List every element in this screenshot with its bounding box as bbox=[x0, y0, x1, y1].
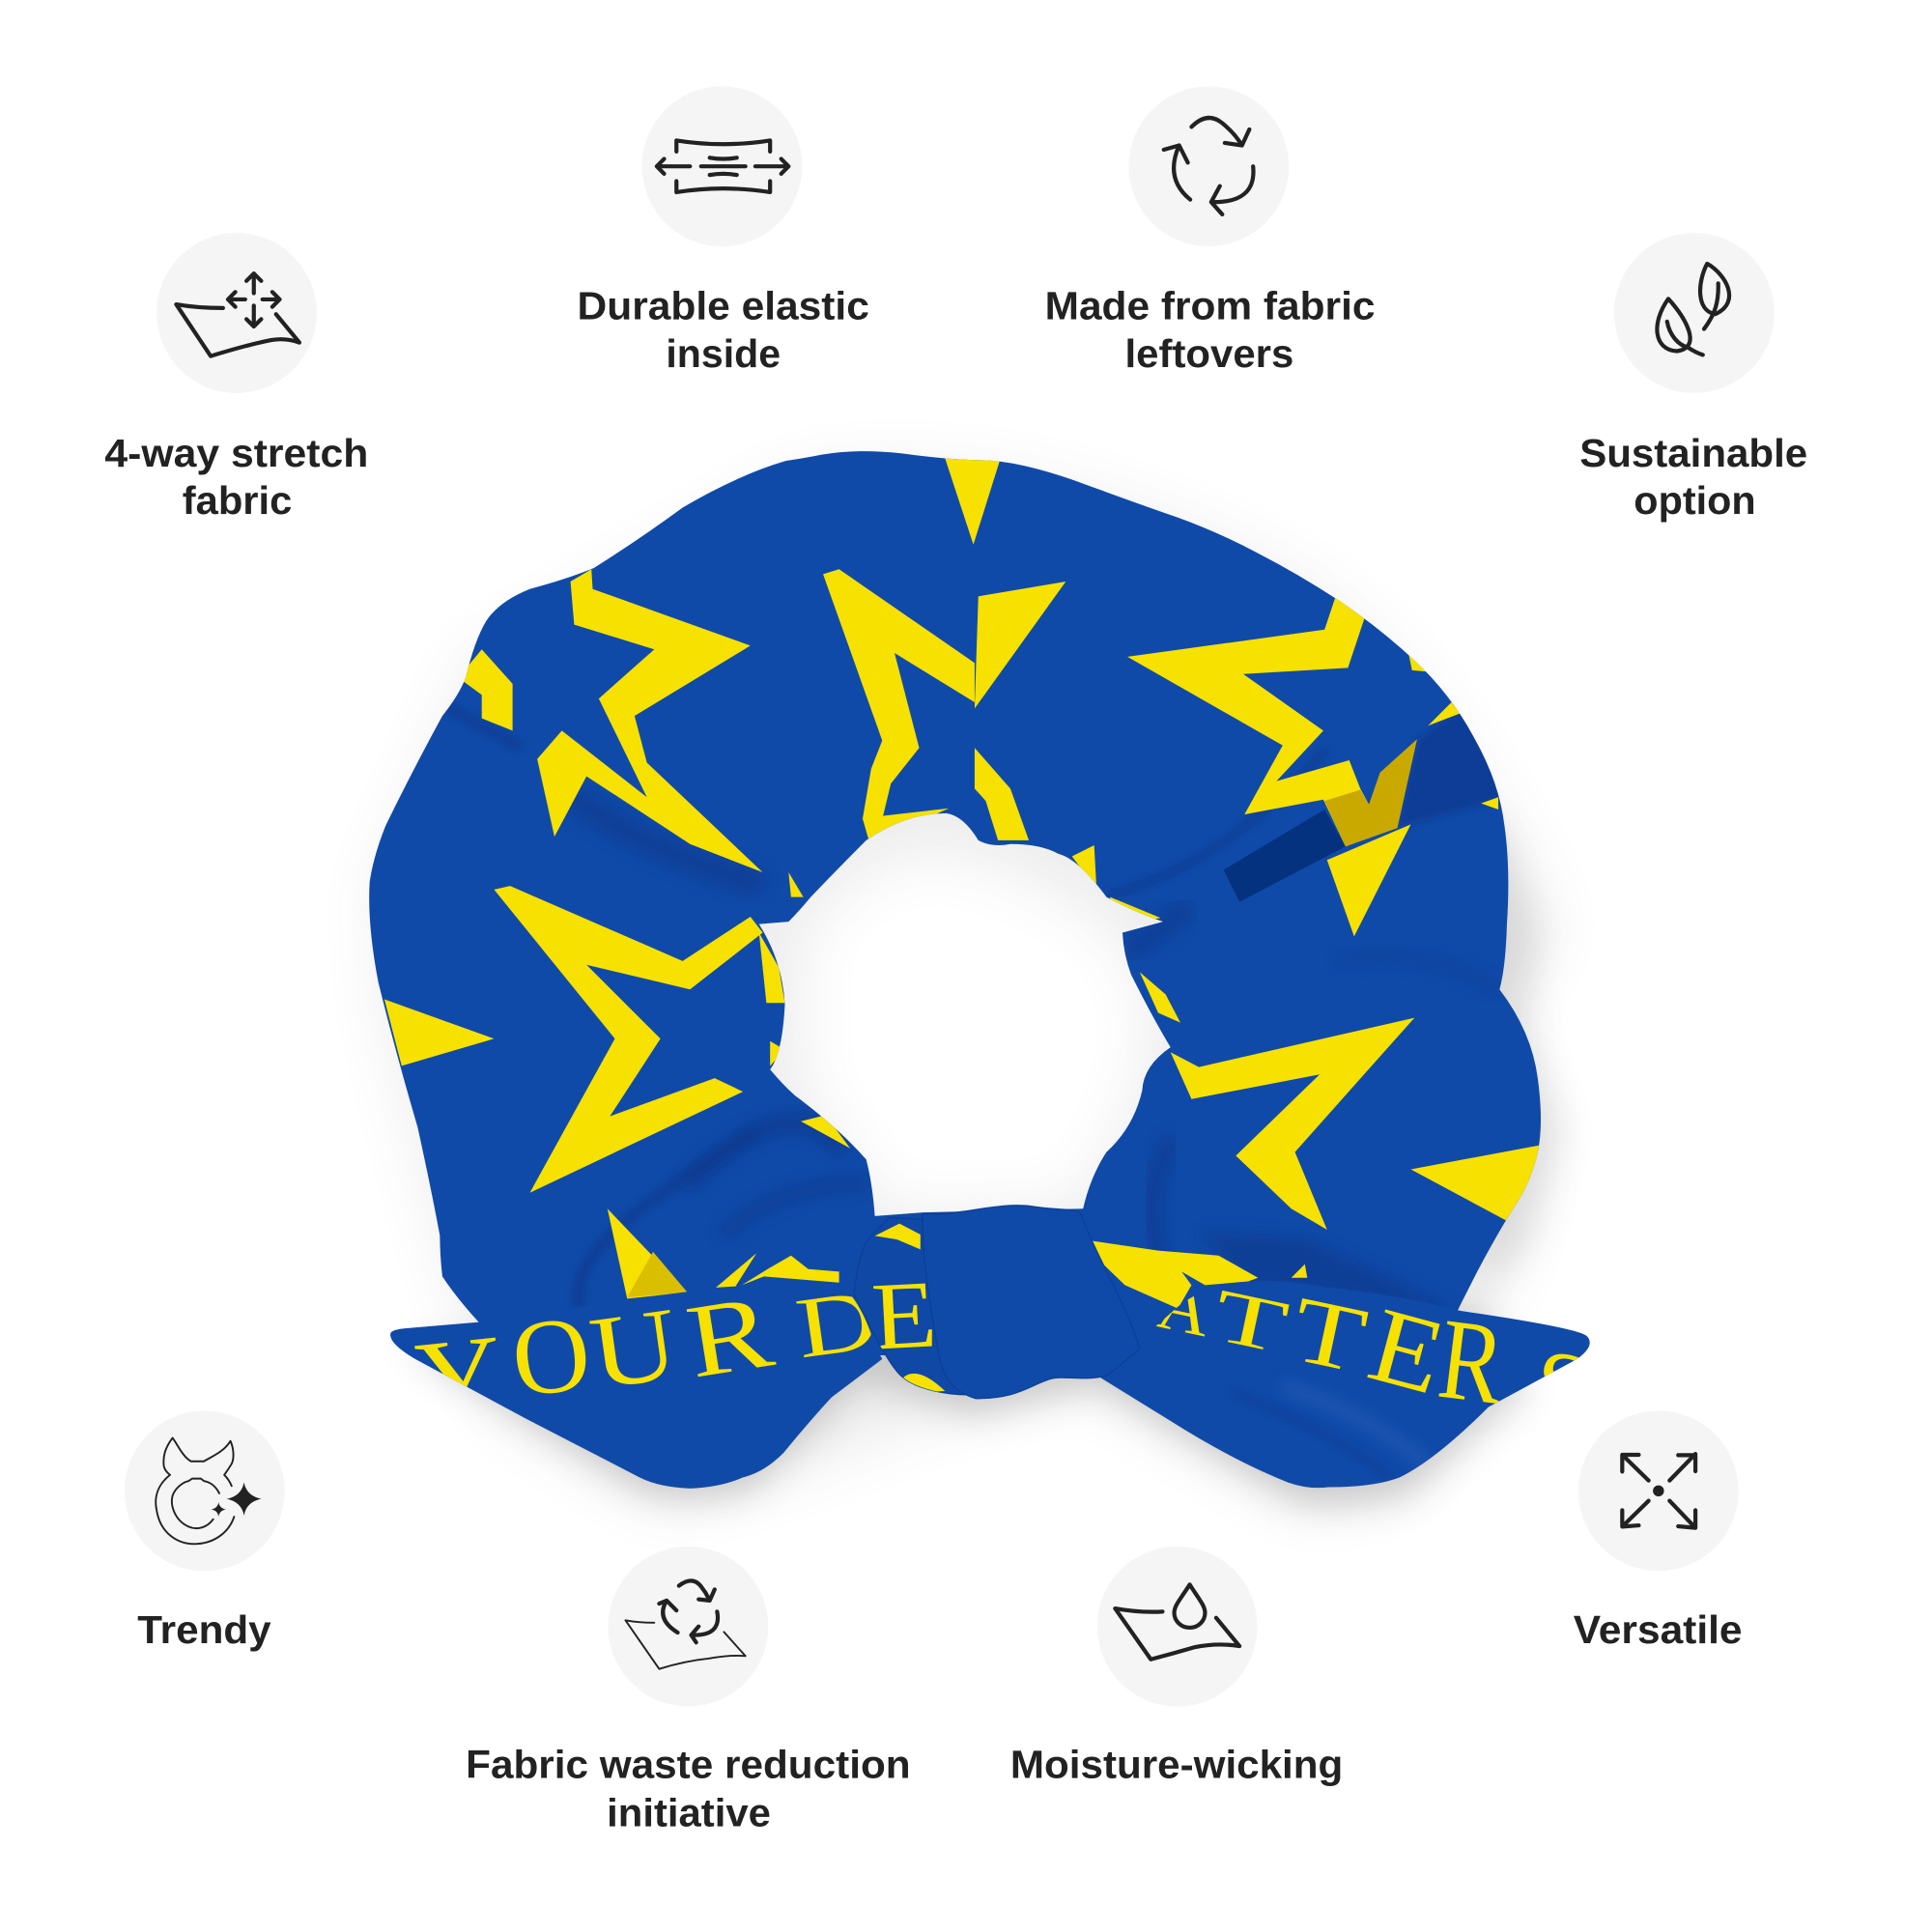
icon: recycle arrows bbox=[1128, 86, 1289, 246]
icon: stretch sheet bbox=[156, 233, 317, 393]
label: Moisture-wicking bbox=[1010, 1743, 1343, 1787]
icon: drop over sheet bbox=[1097, 1547, 1258, 1707]
icon: scrunchie with sparkles bbox=[125, 1410, 285, 1571]
label bbox=[466, 1743, 911, 1834]
label: Versatile bbox=[1574, 1607, 1743, 1652]
feature: 4-way stretch fabric bbox=[104, 233, 368, 523]
label: Trendy bbox=[137, 1607, 271, 1652]
label bbox=[578, 283, 869, 376]
icon: leaves bbox=[1614, 233, 1775, 393]
scrunchie body bbox=[369, 451, 1543, 1355]
feature: made from fabric leftovers bbox=[1045, 86, 1375, 376]
bow tail: left with text: D bbox=[790, 1271, 884, 1377]
soft drop shadow bbox=[376, 469, 1565, 1509]
bow tail: right with text: A bbox=[1151, 1264, 1218, 1352]
bow tail: left with text: Y bbox=[411, 1311, 509, 1449]
label bbox=[104, 431, 368, 523]
feature: versatile bbox=[1574, 1410, 1743, 1652]
knot back with print bbox=[854, 1217, 967, 1395]
feature: trendy bbox=[125, 1410, 285, 1652]
fabric folds and shading bbox=[450, 549, 1509, 1312]
bow tail: left with text: R bbox=[679, 1272, 781, 1400]
icon: recycle over sheet bbox=[608, 1547, 768, 1707]
label bbox=[1045, 283, 1375, 376]
label bbox=[1579, 431, 1807, 523]
bow tail: right with text: E bbox=[1358, 1285, 1457, 1417]
label: Made from fabric bbox=[1045, 283, 1375, 327]
bow tail: right with text: T bbox=[1283, 1276, 1375, 1393]
label: Durable elastic bbox=[578, 283, 869, 327]
feature: durable elastic inside bbox=[578, 86, 869, 376]
label: initiative bbox=[607, 1790, 771, 1834]
knot front bbox=[923, 1206, 1140, 1399]
label: leftovers bbox=[1125, 331, 1293, 376]
knot back with print: E bbox=[869, 1261, 939, 1371]
icon: four outward arrows bbox=[1578, 1410, 1739, 1571]
icon: elastic bbox=[642, 86, 802, 246]
label: option bbox=[1634, 478, 1756, 523]
bow tail: right with text: T bbox=[1207, 1273, 1294, 1370]
product: scrunchie with bow bbox=[369, 451, 1604, 1510]
label: 4-way stretch bbox=[104, 431, 368, 475]
label: inside bbox=[666, 331, 781, 376]
bow tail: left with text: O bbox=[506, 1293, 596, 1420]
bow tail: right with text: S bbox=[1520, 1326, 1604, 1451]
label: Sustainable bbox=[1579, 431, 1807, 475]
bow tail: left with text bbox=[390, 1271, 884, 1489]
feature: sustainable option bbox=[1579, 233, 1807, 523]
label: fabric bbox=[183, 478, 292, 523]
feature: moisture-wicking bbox=[1010, 1547, 1343, 1787]
bow tail: left with text: U bbox=[583, 1285, 685, 1410]
bow tail: right with text bbox=[1100, 1264, 1604, 1488]
feature: fabric waste reduction initiative bbox=[466, 1547, 911, 1834]
label: Fabric waste reduction bbox=[466, 1743, 911, 1787]
bow tail: right with text: R bbox=[1433, 1293, 1511, 1429]
star print on fabric bbox=[384, 458, 1543, 1309]
